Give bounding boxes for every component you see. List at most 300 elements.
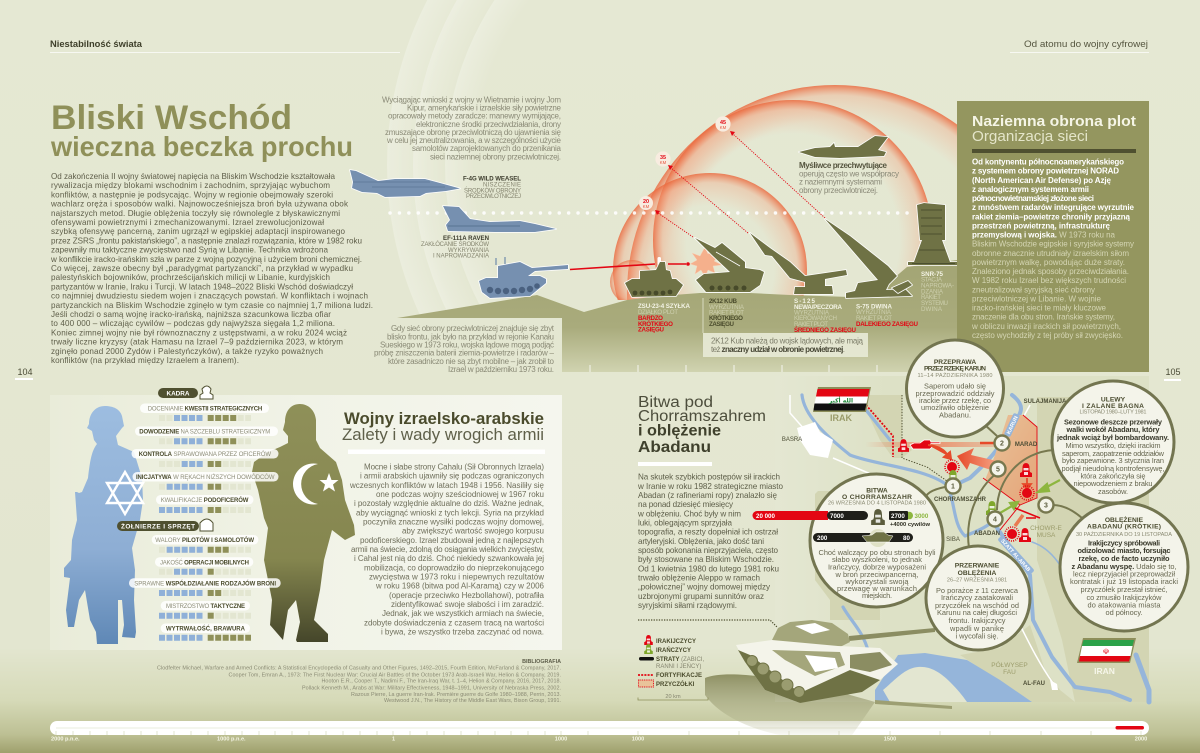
Iraqi unit at Abadan bbox=[1019, 528, 1031, 542]
rating row: mobile operations: JAKOŚĆ OPERACJI MOBILNYCH bbox=[160, 558, 249, 566]
panel body text: przeciwlotniczej w Libanie. W wojnie bbox=[972, 294, 1102, 304]
callout: rains and flooded marshes: jednak wciąż był bombardowany. bbox=[1056, 433, 1169, 442]
callout: short siege of Abadan: lecz nieprzyjaciel przeprowadził bbox=[1073, 570, 1175, 578]
flag of Iraq: الله أكبر bbox=[828, 396, 853, 404]
bibliography bbox=[157, 659, 561, 704]
place labels: SIBA bbox=[946, 537, 960, 543]
callout: battle of Chorramszahr: słabo wyszkoleni, to jednak bbox=[832, 555, 922, 564]
panel body text: przestrzeń powietrzną, infrastrukturę bbox=[972, 221, 1111, 230]
node 2: 2 bbox=[1000, 440, 1004, 448]
Iranian unit at Abadan bbox=[986, 501, 998, 515]
page number 104 bbox=[15, 367, 33, 380]
article: siege of Abadan bbox=[637, 473, 783, 610]
node 3: 3 bbox=[1044, 502, 1048, 510]
legend: fortifications: FORTYFIKACJE bbox=[656, 673, 702, 679]
silhouette: Israeli soldier bbox=[64, 406, 143, 644]
intro article text: co najmniej dwudziestu siedem wojen i znaczących powstań. W konfliktach i wojnach bbox=[51, 292, 368, 301]
callout: short siege of Abadan: do atakowania miasta bbox=[1088, 600, 1161, 610]
interceptor note: operują często we współpracy bbox=[799, 169, 899, 178]
heading: battle of Chorramszahr: i oblężenie bbox=[638, 422, 721, 440]
F-4G label bbox=[463, 176, 521, 200]
article: strengths and weaknesses: one podczas wojny sześciodniowej w 1967 roku bbox=[376, 490, 544, 499]
intro article text: najstarszych metod. Długie oblężenia toczyły się równolegle z błyskawicznymi bbox=[51, 209, 340, 218]
article: siege of Abadan: topografia, a reszty dopełniał ich ostrzał bbox=[638, 528, 778, 537]
article: strengths and weaknesses: Jednak, jak we wszystkich armiach na świecie, bbox=[382, 609, 544, 618]
flag of Iran bbox=[1077, 638, 1136, 663]
label 2K12 Kub: RAKIET PLOT bbox=[709, 310, 744, 316]
callout: short siege of Abadan: 30 PAŹDZIERNIKA DO 19 LISTOPADA bbox=[1076, 531, 1172, 538]
timeline ticks bbox=[56, 731, 1141, 735]
legend: Iraqis: IRAKIJCZYCY bbox=[656, 639, 696, 645]
cities and roads bbox=[790, 395, 1058, 690]
rating row: tactics bbox=[159, 601, 251, 616]
article: siege of Abadan: w oblężeniu. Choć były w nim bbox=[637, 509, 741, 518]
label S-75: WYRZUTNIA bbox=[856, 309, 892, 316]
air defence intro text bbox=[382, 95, 562, 161]
article: siege of Abadan: Abadan (z rafineriami ropy) znalazło się bbox=[638, 491, 777, 500]
dotted leader to tank bbox=[638, 620, 777, 627]
label S-75: DALEKIEGO ZASIĘGU bbox=[856, 321, 919, 328]
article: siege of Abadan: Na skutek szybkich postępów sił irackich bbox=[638, 473, 780, 482]
panel body text: rakiet ziemia–powietrze chroniły przyjazną bbox=[972, 212, 1131, 221]
callout: short siege of Abadan: co zmusiło Irakijczyków bbox=[1086, 593, 1162, 602]
article: siege of Abadan: trwało oblężenie Aleppo w ramach bbox=[638, 574, 760, 582]
node 5: 5 bbox=[996, 466, 1000, 474]
intro article text: wachlarz oręża i sposobów walki. Najnowocześniejsza broń była używana obok bbox=[50, 200, 349, 209]
place labels: ABADAN bbox=[974, 531, 1000, 537]
article: siege of Abadan: syryjskimi siłami rządowymi. bbox=[638, 601, 737, 610]
callout: crossing the Karun: umożliwiło oblężenie bbox=[921, 403, 989, 412]
arrow down to burst bbox=[1023, 478, 1031, 489]
label S-125: NEWA/PECZORA bbox=[794, 304, 843, 311]
panel heading: Naziemna obrona plot bbox=[972, 114, 1136, 130]
tank losses bar: 80 bbox=[903, 535, 910, 542]
ground box: text on front-line air defence bbox=[374, 324, 555, 374]
label Iran: IRAN bbox=[1094, 666, 1115, 676]
label 2K12 Kub: 2K12 KUB bbox=[709, 298, 738, 305]
panel body text: północnowietnamskiej złożone sieci bbox=[972, 194, 1094, 203]
icon: officer bbox=[200, 386, 213, 399]
article: strengths and weaknesses: i armii arabskich ujawniły się podczas ograniczonych bbox=[360, 472, 544, 481]
panel body text: W 1982 roku Izrael bez większych trudności bbox=[972, 276, 1126, 285]
panel body text: z mnóstwem radarów integrujące wyrzutnie bbox=[972, 203, 1135, 212]
panel: Arab-Israeli wars bbox=[50, 386, 562, 650]
legend: losses: RANNI I JEŃCY) bbox=[656, 663, 701, 670]
place labels: CHOWR-E bbox=[1030, 525, 1063, 532]
panel heading bbox=[972, 114, 1136, 145]
interceptor note: Myśliwce przechwytujące bbox=[799, 161, 888, 170]
callout: crossing the Karun: przeprowadzić oddziały bbox=[916, 389, 995, 398]
timeline labels: 1 bbox=[392, 736, 395, 742]
article: strengths and weaknesses: i Cahal jest nią do dziś. Choć niekiedy szwankowała jej bbox=[354, 554, 544, 563]
callout: rains and flooded marshes: zasobów. bbox=[1098, 487, 1128, 496]
tank losses bar: 200 bbox=[817, 535, 828, 542]
legend: bridgeheads: PRZYCZÓŁKI bbox=[656, 680, 695, 688]
callout: breaking the siege bbox=[926, 546, 1030, 650]
header right: Od atomu do wojny cyfrowej bbox=[1024, 39, 1148, 49]
article: siege of Abadan: uzbrojonymi grupami sunnitów oraz bbox=[638, 592, 764, 601]
article: strengths and weaknesses: zwycięstwa w 1973 roku i niepewnych rezultatów bbox=[369, 572, 544, 582]
intro article text: Co więcej, zawsze obecny był „paradygmat partyzancki”, na przykład w wypadku bbox=[51, 264, 353, 273]
place labels: AL-FAU bbox=[1023, 681, 1045, 687]
heading: battle of Chorramszahr: Bitwa pod bbox=[638, 394, 713, 411]
callout: breaking the siege: OBLĘŻENIA bbox=[958, 568, 996, 577]
timeline highlighted period bbox=[1116, 726, 1144, 730]
article: strengths and weaknesses: mobilizacja, co doprowadziło do nieprzekonującego bbox=[364, 563, 545, 572]
ground box: text on front-line air defence: blisko frontu, jak było na przykład w rejonie Kanału bbox=[387, 332, 554, 341]
callout: rains and flooded marshes: walki wokół Abadanu, który bbox=[1066, 425, 1160, 434]
dotted supply line bbox=[902, 395, 947, 481]
range badge 45 km: 45 bbox=[720, 120, 726, 126]
rivers bbox=[802, 395, 1149, 702]
label SNR-75: STACJA bbox=[921, 277, 943, 284]
launcher: ZSU-23-4 Szyłka bbox=[625, 262, 683, 297]
heading: battle of Chorramszahr bbox=[638, 394, 766, 456]
callout: battle of Chorramszahr: BITWA bbox=[866, 488, 888, 494]
article: strengths and weaknesses bbox=[349, 462, 545, 637]
intro article text: to 400 000 – wliczając cywilów – podczas gdy najwyższa sięgała 1,2 miliona. bbox=[51, 319, 335, 328]
label SNR-75: DZANIA bbox=[921, 288, 944, 295]
ground box: text on front-line air defence: próbę zniszczenia baterii ziemia-powietrze i radarów – bbox=[374, 349, 555, 358]
article: strengths and weaknesses: zidentyfikować swoje słabości i im zaradzić. bbox=[391, 600, 544, 609]
river label Karun bbox=[1004, 413, 1021, 438]
range badge 35 km bbox=[655, 151, 671, 167]
article: strengths and weaknesses: Mocne i słabe strony Cahalu (Sił Obronnych Izraela) bbox=[364, 462, 544, 472]
intro article text: Od zakończenia II wojny światowej napięcia na Bliskim Wschodzie kształtowała bbox=[51, 172, 335, 181]
heading: Arab-Israeli wars bbox=[342, 409, 544, 444]
aircraft: F-4G Wild Weasel bbox=[350, 170, 460, 197]
EF-111A label: EF-111A RAVEN bbox=[443, 235, 489, 242]
label ZSU-23-4: DZIAŁKO PLOT bbox=[638, 309, 678, 316]
callout: rains and flooded marshes: LISTOPAD 1980–LUTY 1981 bbox=[1080, 410, 1146, 416]
article: siege of Abadan: były stosowane na Bliskim Wschodzie. bbox=[638, 555, 774, 564]
Iraqi attack beam bbox=[865, 442, 1000, 447]
article: strengths and weaknesses: i bywa, że wszystko trzeba zaczynać od nowa. bbox=[381, 628, 544, 637]
casualties bars: Iraq and Iran: 3000 bbox=[914, 513, 929, 520]
article: strengths and weaknesses: w roku 1968 (bitwa pod Al-Karamą) czy w 2006 bbox=[375, 582, 545, 591]
note box on 2K12 Kub bbox=[703, 333, 868, 357]
air defence intro text: zmuszające obronę przeciwlotniczą do ujawnienia się bbox=[385, 128, 562, 137]
F-4G label: ŚRODKÓW OBRONY bbox=[464, 186, 521, 194]
label 2K12 Kub bbox=[703, 298, 745, 333]
timeline labels: 1000 p.n.e. bbox=[217, 736, 246, 742]
fortification line bbox=[866, 405, 893, 457]
air defence intro text: Kipur, amerykańskie i izraelskie siły powietrzne bbox=[407, 104, 562, 112]
article: strengths and weaknesses: zdobyte doświadczenia z czasem tracą na wartości bbox=[364, 618, 544, 627]
node 4 bbox=[988, 512, 1002, 526]
callout: breaking the siege: wpadli w panikę bbox=[949, 624, 1004, 633]
panel body text: Od kontynentu północnoamerykańskiego bbox=[972, 158, 1124, 166]
callout: breaking the siege: 26–27 WRZEŚNIA 1981 bbox=[947, 576, 1007, 584]
callout: short siege of Abadan: OBLĘŻENIE bbox=[1105, 515, 1144, 524]
label 2K12 Kub: WYRZUTNIA bbox=[709, 304, 745, 311]
label 2K12 Kub: ZASIĘGU bbox=[709, 321, 735, 328]
burst at Marad front bbox=[1020, 486, 1034, 500]
rating row: pilots: WALORY PILOTÓW I SAMOLOTÓW bbox=[155, 536, 254, 544]
callout: short siege of Abadan: od północy. bbox=[1106, 608, 1142, 617]
label SNR-75: RAKIET bbox=[921, 294, 941, 301]
rating row: NCOs bbox=[156, 495, 254, 510]
note box on 2K12 Kub: też znaczny udział w obronie powietrznej. bbox=[711, 345, 845, 354]
article: siege of Abadan: artyleryjski. Oblężenia, jako dość tani bbox=[638, 537, 764, 546]
rating row: command bbox=[135, 426, 278, 441]
intro article text: szybką ofensywę pancerną, zanim ugrzązł w egipskiej adaptacji inspirowanego bbox=[51, 227, 345, 236]
callout: battle of Chorramszahr: Choć walczący po obu stronach byli bbox=[818, 548, 936, 557]
callout: short siege of Abadan: przyczółek przestał istnieć, bbox=[1080, 585, 1168, 594]
ground box: text on front-line air defence: Sueskiego w 1973 roku, wojska lądowe mogą podjąć bbox=[380, 341, 554, 350]
label ZSU-23-4 bbox=[638, 303, 691, 334]
callout: short siege of Abadan: z Abadanu wyspę. Udało się to, bbox=[1072, 562, 1176, 571]
rating row: endurance: WYTRWAŁOŚĆ, BRAWURA bbox=[166, 624, 246, 632]
intro article text: partyzanckich na Bliskim Wschodzie zginęło w tym czasie co najmniej 1,7 miliona ludzi. bbox=[51, 301, 373, 310]
panel body text: iracko-irańskiej sieci te miały kluczowe bbox=[972, 304, 1107, 313]
interceptor note bbox=[799, 161, 899, 195]
callout: crossing the Karun: Saperom udało się bbox=[924, 381, 986, 390]
callout: rains and flooded marshes: było zapewnione. 3 stycznia Iran bbox=[1062, 456, 1164, 465]
map of Chorramszahr and Abadan bbox=[775, 376, 1149, 702]
rating row: officers: KONTROLA SPRAWOWANA PRZEZ OFICERÓW bbox=[139, 451, 271, 458]
intro article text: konfliktów (na przykład między Izraelem a Iranem). bbox=[51, 356, 239, 365]
callout: rains and flooded marshes: niepowodzeniem z braku bbox=[1074, 479, 1152, 488]
callout: short siege of Abadan: Irakijczycy spróbowali bbox=[1088, 538, 1160, 548]
timeline labels: 1000 bbox=[632, 736, 644, 742]
big tank shadow bbox=[705, 674, 875, 740]
article: siege of Abadan: Od 1 kwietnia 1980 do lutego 1981 roku bbox=[638, 564, 779, 573]
callout: breaking the siege: frontu. Irakijczycy bbox=[948, 616, 1006, 625]
intro article text: zapewniły mu taktyczne zwycięstwo nad Syrią w Libanie. Technika wdrożona bbox=[51, 246, 328, 255]
big orange counter-attack arrow bbox=[957, 448, 997, 471]
EF-111A label: I NAPROWADZANIA bbox=[433, 254, 489, 260]
casualties bars: Iraq and Iran: 2700 bbox=[891, 513, 905, 520]
Iraqi unit at Marad bbox=[1020, 463, 1032, 477]
panel body text: obronne znacznie utrudniały izraelskim siłom bbox=[972, 249, 1129, 258]
connector lines to callouts bbox=[925, 425, 1082, 548]
page number 105 bbox=[1164, 367, 1181, 381]
intro article text bbox=[50, 172, 373, 365]
air defence intro text: opracowały metody zaradcze: manewry wymijające, bbox=[388, 112, 561, 121]
article: strengths and weaknesses: (operacje przeciwko Hezbollahowi), potrafiła bbox=[389, 591, 545, 600]
article: strengths and weaknesses: podoficerskiego. Izrael zbudował jedną z najlepszych bbox=[360, 536, 544, 545]
range badge 35 km: 35 bbox=[660, 155, 666, 161]
callout: crossing the Karun: PRZEZ RZEKĘ KARUN bbox=[924, 366, 986, 372]
pill: Kadra bbox=[158, 388, 198, 398]
label S-75 bbox=[856, 303, 919, 328]
air defence intro text: samolotów zaprojektowanych do przenikania bbox=[412, 144, 562, 153]
casualties bars: Iraq and Iran: +4000 cywilów bbox=[890, 522, 931, 528]
callout: rains and flooded marshes: Mimo wszystko, dzięki irackim bbox=[1066, 441, 1160, 450]
callout: short siege of Abadan: odizolować miasto, forsując bbox=[1078, 546, 1170, 555]
intro article text: Koniec zimnej wojny nie był równoznaczny z ustępstwami, a w roku 2024 wciąż bbox=[51, 328, 347, 337]
ground box: text on front-line air defence: Izrael w październiku 1973 roku. bbox=[448, 365, 554, 374]
map legend bbox=[638, 635, 708, 700]
range badge 35 km: KM bbox=[660, 160, 667, 165]
label ZSU-23-4: ZASIĘGU bbox=[638, 327, 665, 334]
rating row: NCOs: KWALIFIKACJE PODOFICERÓW bbox=[161, 496, 249, 504]
panel body text: przemysłową i wojska. W 1973 roku na bbox=[972, 230, 1116, 240]
Iraqi unit bbox=[898, 439, 909, 452]
label S-125 bbox=[794, 298, 857, 334]
burst at Abadan bbox=[1005, 527, 1019, 541]
white dotted altitude line bbox=[390, 211, 913, 215]
interceptor note: z naziemnymi systemami bbox=[799, 178, 882, 187]
timeline bbox=[50, 721, 1149, 742]
pill: soldiers and equipment: ŻOŁNIERZE I SPRZĘT bbox=[121, 522, 195, 530]
red attack line from tank bbox=[570, 257, 690, 272]
callout: battle of Chorramszahr: Irańczycy, dobrze wyposażeni bbox=[828, 562, 926, 572]
panel: ground air defence network bbox=[957, 101, 1149, 372]
river label Karun: KARUN bbox=[1006, 415, 1020, 436]
orange arrow to Abadan bbox=[1015, 515, 1023, 526]
legend: Iranians: IRAŃCZYCY bbox=[656, 646, 691, 654]
article: siege of Abadan: „połowicznej” wojny domowej między bbox=[638, 583, 771, 592]
label S-125: WYRZUTNIA bbox=[794, 310, 830, 316]
heading: battle of Chorramszahr: Abadanu bbox=[638, 439, 711, 456]
F-4G label: NISZCZENIE bbox=[483, 182, 521, 188]
callout: crossing the Karun bbox=[906, 340, 1004, 437]
rating row: pilots bbox=[152, 535, 258, 550]
callout: crossing the Karun: PRZEPRAWA bbox=[934, 359, 976, 366]
callout: rains and flooded marshes: podjął nieudolną kontrofensywę, bbox=[1062, 464, 1164, 473]
place labels: BASRA bbox=[782, 437, 802, 443]
land regions bbox=[815, 395, 1149, 702]
intro article text: partyzantów w Iranie, Iraku i Turcji. W latach 1948–2022 Bliski Wschód doświadczył bbox=[51, 282, 353, 291]
EF-111A label: WYKRYWANIA bbox=[448, 248, 489, 254]
callout: breaking the siege: Po porażce z 11 czerwca bbox=[936, 586, 1019, 595]
node 4: 4 bbox=[993, 516, 997, 524]
Iraqi tank bbox=[910, 440, 940, 449]
decorative radar fans bbox=[387, 0, 503, 314]
place labels: SULAJMANIJA bbox=[1024, 399, 1067, 405]
intro article text: rywalizacja między blokami wschodnim i zachodnim, sprzyjając wybuchom bbox=[51, 181, 330, 190]
burst near Chorramszahr bbox=[945, 460, 959, 474]
node 1 bbox=[946, 478, 960, 494]
timeline labels bbox=[51, 736, 1147, 742]
F-4G label: F-4G WILD WEASEL bbox=[463, 176, 521, 182]
EF-111A label bbox=[421, 235, 489, 260]
node 2 bbox=[994, 436, 1010, 450]
rating row: tactics: MISTRZOSTWO TAKTYCZNE bbox=[166, 604, 245, 610]
callout: breaking the siege: PRZERWANIE bbox=[955, 562, 1000, 570]
label ZSU-23-4: BARDZO bbox=[638, 315, 663, 322]
legend: losses: STRATY (ZABICI, bbox=[656, 657, 704, 663]
range badge 20 km bbox=[639, 196, 653, 210]
heading: Arab-Israeli wars: Zalety i wady wrogich armii bbox=[342, 425, 544, 444]
ground box: text on front-line air defence: które zasadniczo nie są zbyt mobilne – jak zrobił to bbox=[388, 357, 555, 366]
EF-111A label: ZAKŁÓCANIE ŚRODKÓW bbox=[421, 240, 489, 248]
panel body text: z systemem obrony powietrznej NORAD bbox=[972, 167, 1119, 176]
heading: battle of Chorramszahr: Chorramszahrem bbox=[638, 408, 766, 425]
article: strengths and weaknesses: poczyniła znaczne wysiłki podczas wojny domowej, bbox=[363, 518, 544, 526]
air defence intro text: sieci naziemnej obrony przeciwlotniczej. bbox=[430, 152, 561, 161]
callout: short siege of Abadan: rzekę, co de facto uczyniło bbox=[1078, 554, 1170, 563]
launcher: S-125 Newa/Peczora bbox=[750, 233, 847, 294]
timeline labels: 1000 bbox=[555, 736, 567, 742]
intro article text: ofensywami powietrznymi i zmechanizowanymi. Izrael zrewolucjonizował bbox=[51, 218, 324, 227]
callout: short siege of Abadan: ABADANU (KRÓTKIE) bbox=[1087, 522, 1161, 530]
green arrows bbox=[1000, 480, 1060, 513]
panel body text: z analogicznym systemem armii bbox=[972, 185, 1089, 194]
air defence intro text: Wyciągając wnioski z wojny w Wietnamie i wojny Jom bbox=[382, 95, 561, 104]
callout: battle of Chorramszahr: przewagę w warunkach bbox=[837, 584, 917, 593]
node 1: 1 bbox=[951, 484, 955, 490]
range badge 20 km: KM bbox=[643, 204, 650, 209]
panel body text: powietrznym walkę, powodując duże straty. bbox=[972, 258, 1125, 267]
header left: Niestabilność świata bbox=[50, 39, 143, 49]
timeline labels: 1500 bbox=[884, 736, 896, 742]
legend: losses bbox=[639, 657, 704, 670]
rating row: mobile operations bbox=[155, 557, 253, 572]
rating row: endurance bbox=[159, 624, 251, 638]
label ZSU-23-4: KRÓTKIEGO bbox=[638, 320, 673, 328]
intro article text: konfliktów, a następnie je podsycając. Wojny w regionie obejmowały szeroki bbox=[51, 190, 333, 199]
label ZSU-23-4: ZSU-23-4 SZYŁKA bbox=[638, 303, 691, 310]
callout: crossing the Karun: Abadanu. bbox=[939, 410, 971, 420]
node 3 bbox=[1038, 498, 1054, 512]
header right bbox=[1010, 39, 1149, 53]
icon: soldier with gear bbox=[200, 519, 213, 531]
bibliography: Cooper Tom, Emran A., 1973: The First Nuclear War: Crucial Air Battles of the October 1973 Arab-Israeli War, Helion & Company, 2019. bbox=[228, 672, 561, 678]
callout: battle of Chorramszahr: O CHORRAMSZAHR bbox=[842, 494, 912, 501]
red attack arrow bbox=[928, 445, 951, 459]
place labels: MARAD bbox=[1015, 442, 1038, 448]
place labels: CHORRAMSZAHR bbox=[934, 497, 987, 503]
main title: Bliski Wschód bbox=[51, 99, 292, 137]
callout: breaking the siege: przyczółek na wschód od bbox=[935, 601, 1019, 610]
callout: battle of Chorramszahr: miejskich. bbox=[862, 591, 892, 600]
panel body text: często wychodziły z tej próby sił zwycięsko. bbox=[972, 331, 1123, 340]
page number 104: 104 bbox=[17, 367, 33, 377]
label S-75: S-75 DWINA bbox=[856, 303, 893, 310]
range badge 20 km: 20 bbox=[643, 199, 649, 205]
air defence intro text: w celu jej zneutralizowania, a w szczególności użycie bbox=[386, 136, 562, 145]
panel heading: Organizacja sieci bbox=[972, 129, 1088, 145]
interceptor note: obrony przeciwlotniczej. bbox=[799, 186, 878, 195]
blue tank bbox=[479, 257, 568, 298]
soldier icon bbox=[869, 507, 887, 525]
article: strengths and weaknesses: aby wyciągnąć wnioski z tych lekcji. Syria na przykład bbox=[356, 508, 544, 517]
label SNR-75: SNR-75 bbox=[921, 271, 944, 278]
star of David bbox=[107, 472, 143, 514]
interceptor aircraft bbox=[799, 136, 888, 158]
intro article text: w konflikcie iracko-irańskim szła w parze z wojną pozycyjną i użyciem broni chemicznej. bbox=[50, 255, 362, 264]
callout: breaking the siege: i wycofali się. bbox=[956, 632, 998, 640]
label SNR-75: SYSTEMU bbox=[921, 300, 948, 307]
bibliography: Westwood J.N., The History of the Middle East Wars, Bison Group, 1991. bbox=[384, 698, 561, 704]
rating row: combined arms: SPRAWNE WSPÓŁDZIAŁANIE RODZAJÓW BRONI bbox=[134, 579, 276, 587]
Iranian unit at Chorramszahr bbox=[947, 470, 959, 484]
bibliography: Pollack Kenneth M., Arabs at War: Military Effectiveness, 1948–1991, University of Nebraska Press, 2002. bbox=[302, 685, 561, 691]
panel body text: znaczenie dla obu stron. Irańskie systemy, bbox=[972, 313, 1115, 322]
callout: rains and flooded marshes bbox=[1052, 381, 1174, 503]
big T-55 tank bbox=[736, 620, 935, 703]
silhouette: Arab soldier bbox=[252, 404, 355, 642]
intro article text: palestyńskich bojowników, prochrześcijańskich milicji w Libanie, kurdyjskich bbox=[51, 273, 330, 282]
label SNR-75 bbox=[921, 271, 954, 313]
note box on 2K12 Kub: 2K12 Kub należą do wojsk lądowych, ale mają bbox=[711, 337, 864, 346]
bibliography: Hooton E.R., Cooper T., Nadimi F., The Iran-Iraq War, t. 1–4, Helion & Company, 2016, 2017, 2018. bbox=[322, 679, 561, 685]
callout: battle of Chorramszahr: wykorzystali swoją bbox=[844, 577, 909, 586]
radar: SNR-75 bbox=[908, 203, 958, 265]
article: strengths and weaknesses: aby zwiększyć wartość swojego korpusu bbox=[402, 527, 544, 536]
red artillery gun bbox=[1015, 508, 1040, 518]
callout: breaking the siege: Irańczycy zaatakowali bbox=[941, 593, 1013, 602]
article: siege of Abadan: sposób pokonania nieprzyjaciela, często bbox=[638, 546, 778, 555]
flag of Iraq bbox=[813, 387, 871, 412]
launcher: S-75 Dwina bbox=[825, 219, 912, 298]
flag of Iran: ☫ bbox=[1103, 647, 1109, 656]
pill: Kadra: KADRA bbox=[166, 390, 190, 398]
panel body text: Znaleziono jednak sposoby przeciwdziałania. bbox=[972, 267, 1129, 276]
